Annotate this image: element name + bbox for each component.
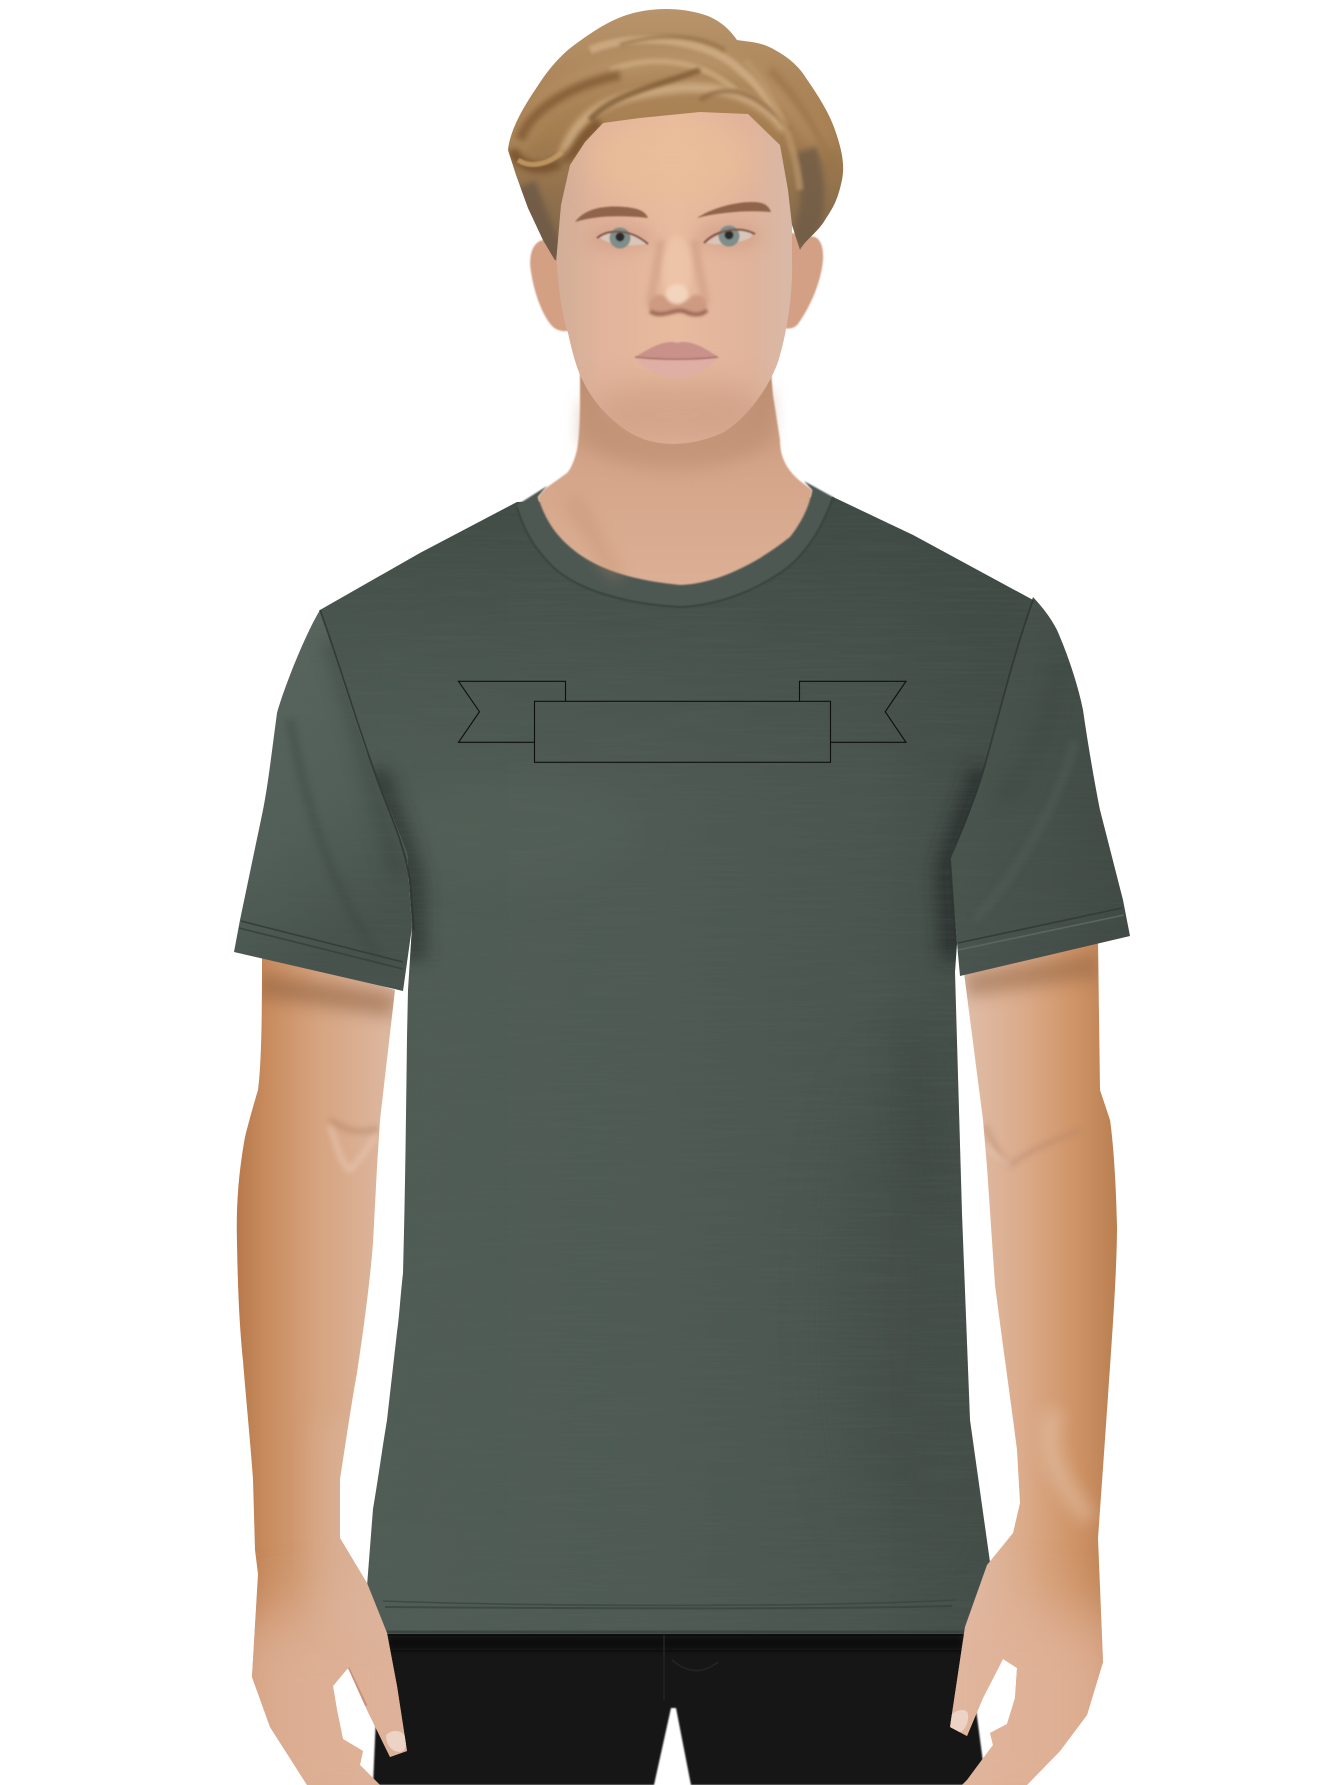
right ear xyxy=(770,230,823,330)
t-shirt xyxy=(220,480,1140,1785)
neck xyxy=(538,360,812,585)
right eye xyxy=(704,226,755,246)
ribbon right tail xyxy=(800,681,906,742)
ribbon centre banner xyxy=(534,701,830,762)
left sleeve xyxy=(234,610,412,991)
eyebrows xyxy=(575,202,771,222)
right arm and hand xyxy=(950,944,1117,1785)
mockup scene: model wearing t-shirt xyxy=(234,9,1130,1785)
shirt body xyxy=(300,480,1045,1640)
black trousers xyxy=(373,1625,986,1785)
left eye xyxy=(597,228,648,248)
ribbon left tail xyxy=(458,681,566,742)
left ear xyxy=(530,225,580,335)
crew-neck collar xyxy=(517,481,833,607)
head xyxy=(500,0,850,460)
face xyxy=(556,112,792,444)
left arm and hand xyxy=(236,958,407,1785)
nose xyxy=(648,284,707,314)
right sleeve xyxy=(950,597,1130,976)
shoulder and armhole seams xyxy=(320,600,1033,945)
left thumbnail xyxy=(386,1731,406,1752)
ribbon outline on chest xyxy=(458,681,906,762)
right thumbnail xyxy=(950,1710,968,1733)
hair xyxy=(500,0,850,260)
lips xyxy=(635,342,718,378)
